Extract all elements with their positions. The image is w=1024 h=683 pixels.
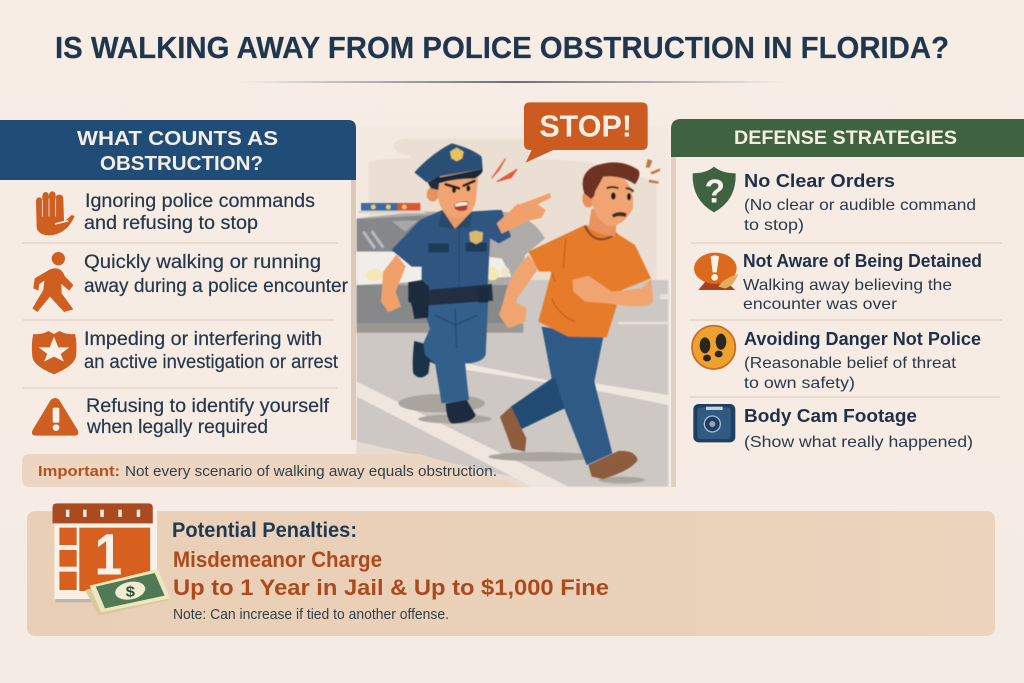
item text: impeding: Impeding or interfering with <box>84 329 322 350</box>
text: penalty amounts: Up to 1 Year in Jail & Up to $1,000 Fine <box>173 575 609 600</box>
panel heading: OBSTRUCTION? <box>100 153 263 175</box>
item text: ignoring commands: Ignoring police commands <box>85 191 315 212</box>
icon: raised hand <box>36 191 75 235</box>
text: misdemeanor charge: Misdemeanor Charge <box>173 547 382 572</box>
icon: footprints <box>692 326 735 369</box>
icon: shield with star <box>32 331 76 374</box>
icon: walking person <box>32 252 73 312</box>
item text: impeding: an active investigation or arrest <box>84 352 339 373</box>
item: no clear orders: No Clear Orders <box>744 170 895 191</box>
item: body cam footage: (Show what really happened) <box>744 434 973 451</box>
item: no clear orders <box>744 170 976 234</box>
item: not aware of being detained: Walking away believing the <box>743 277 952 294</box>
police officer <box>381 143 551 423</box>
icon: shield with question mark: ? <box>705 174 725 211</box>
important callout <box>22 454 525 487</box>
icon: body camera <box>693 404 735 442</box>
important callout: Not every scenario of walking away equals obstruction. <box>125 464 497 480</box>
item: avoiding danger: Avoiding Danger Not Police <box>744 328 981 349</box>
man walking away <box>499 159 660 479</box>
item: no clear orders: (No clear or audible command <box>744 197 976 214</box>
item text: running away <box>84 252 349 297</box>
item: avoiding danger: (Reasonable belief of threat <box>744 355 957 372</box>
icon: alert speech bubble <box>694 253 738 290</box>
panel: potential penalties <box>27 503 995 636</box>
item text: impeding <box>84 329 339 373</box>
street background <box>357 125 670 487</box>
item: not aware of being detained: Not Aware of Being Detained <box>743 250 982 271</box>
speech bubble: STOP! <box>524 102 648 163</box>
police car <box>357 203 545 333</box>
icon: warning triangle <box>32 398 78 436</box>
speech bubble: STOP!: STOP! <box>539 110 632 144</box>
panel heading: WHAT COUNTS AS <box>77 128 278 150</box>
text: note: Note: Can increase if tied to another offense. <box>173 606 449 623</box>
panel: defense strategies <box>671 119 1024 487</box>
icon: calendar and cash: 1 <box>95 522 122 587</box>
item text: refusing to identify: Refusing to identify yourself <box>86 396 330 417</box>
panel heading: DEFENSE STRATEGIES <box>734 128 957 149</box>
item text: ignoring commands <box>84 191 315 234</box>
text: potential penalties heading: Potential Penalties: <box>172 519 357 542</box>
panel heading <box>671 119 1024 157</box>
item: not aware of being detained: encounter was over <box>743 296 898 313</box>
item text: ignoring commands: and refusing to stop <box>84 213 258 234</box>
title: IS WALKING AWAY FROM POLICE OBSTRUCTION IN FLORIDA? <box>55 31 949 65</box>
item text: refusing to identify <box>86 396 330 438</box>
item: not aware of being detained <box>743 250 982 313</box>
item: no clear orders: to stop) <box>744 217 804 234</box>
item text: running away: away during a police encounter <box>84 276 349 297</box>
icon: shield with question mark <box>693 167 736 212</box>
item: avoiding danger <box>744 328 981 392</box>
important callout: Important: <box>38 464 120 480</box>
item: avoiding danger: to own safety) <box>744 375 855 392</box>
icon: calendar and cash: $ <box>126 584 135 600</box>
panel: what counts as obstruction <box>0 120 356 440</box>
panel heading <box>0 120 356 180</box>
item text: refusing to identify: when legally required <box>86 417 268 438</box>
item: body cam footage: Body Cam Footage <box>744 405 917 426</box>
item: body cam footage <box>744 405 973 451</box>
illustration: police officer chasing man walking away <box>357 102 670 487</box>
icon: calendar and cash <box>53 503 170 616</box>
item text: running away: Quickly walking or running <box>84 252 321 273</box>
